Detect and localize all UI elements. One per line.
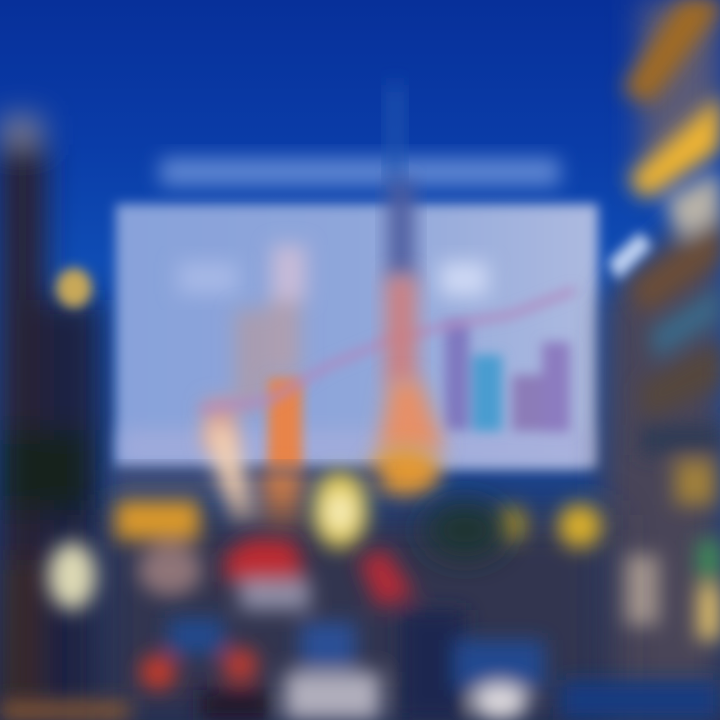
building upper dark backing [640,0,720,190]
bar chart: left grey bars [205,245,306,450]
line chart [200,290,575,410]
bar chart: orange bar [268,378,302,473]
panel callout block [440,262,488,296]
left building silhouette [0,115,100,720]
panel title (blurred heading) [160,158,560,186]
green trees [425,502,505,558]
right building [600,0,720,720]
street lights [48,472,602,610]
left street lamp glow [56,268,92,308]
bar chart: right purple and blue bars [445,322,570,432]
building highlight [608,232,652,280]
panel subtext block [178,262,238,294]
right green and yellow signs [622,540,720,640]
panel lower tint [120,430,590,465]
tower base glow [369,446,441,498]
light streak columns [205,425,302,540]
tower spire [369,85,445,498]
traffic: cars [0,538,720,720]
lower panel shadow band [112,470,382,492]
street-level dark base [100,515,610,720]
building balconies [622,0,720,505]
main chart panel [116,204,598,473]
